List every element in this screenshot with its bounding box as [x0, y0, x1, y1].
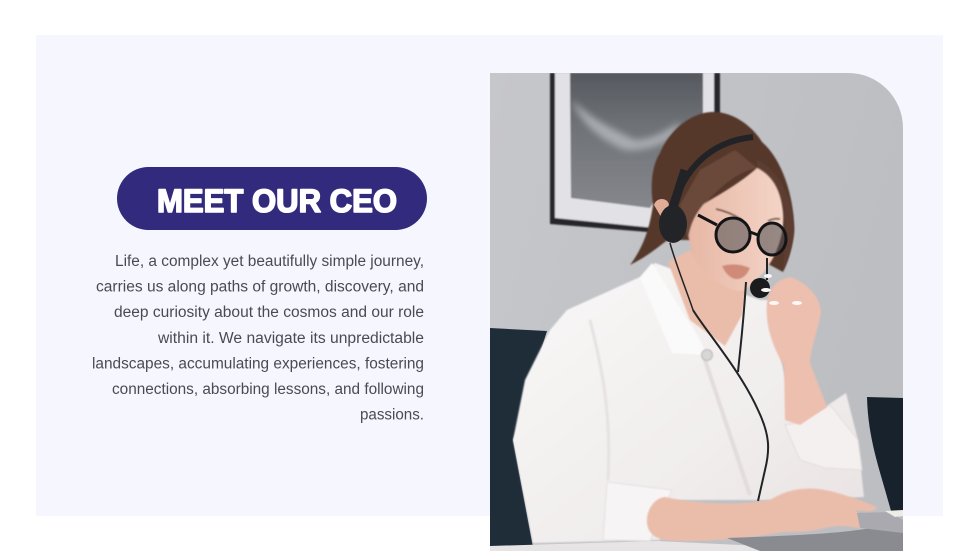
ear — [654, 199, 669, 216]
text block: biography: Life, a complex yet beautifully simple journey, — [115, 253, 424, 270]
raised hand and forearm — [767, 277, 827, 425]
text block: biography: connections, absorbing lessons, and following — [112, 381, 424, 398]
glasses — [698, 215, 786, 255]
heading: meet our ceo: MEET OUR CEO — [157, 183, 397, 219]
text block: biography: landscapes, accumulating experiences, fostering — [92, 355, 424, 372]
photo: CEO wearing a headset at a laptop — [490, 73, 903, 551]
headset — [659, 137, 770, 501]
fingernails — [761, 274, 802, 305]
desk — [490, 541, 760, 551]
framed picture — [550, 73, 720, 233]
hair behind the head — [630, 112, 794, 272]
white shirt — [513, 263, 864, 543]
left chair — [490, 328, 547, 547]
wall — [490, 73, 903, 551]
heading pill — [117, 167, 427, 230]
text block: biography: passions. — [360, 407, 424, 424]
text block: biography: within it. We navigate its unpredictable — [157, 330, 424, 347]
text block: biography: deep curiosity about the cosmos and our role — [114, 304, 424, 321]
text block: biography: carries us along paths of growth, discovery, and — [96, 279, 424, 296]
neck and face — [668, 150, 794, 346]
right chair — [867, 397, 903, 511]
laptop — [727, 510, 903, 551]
typing arm and hand — [647, 488, 877, 541]
